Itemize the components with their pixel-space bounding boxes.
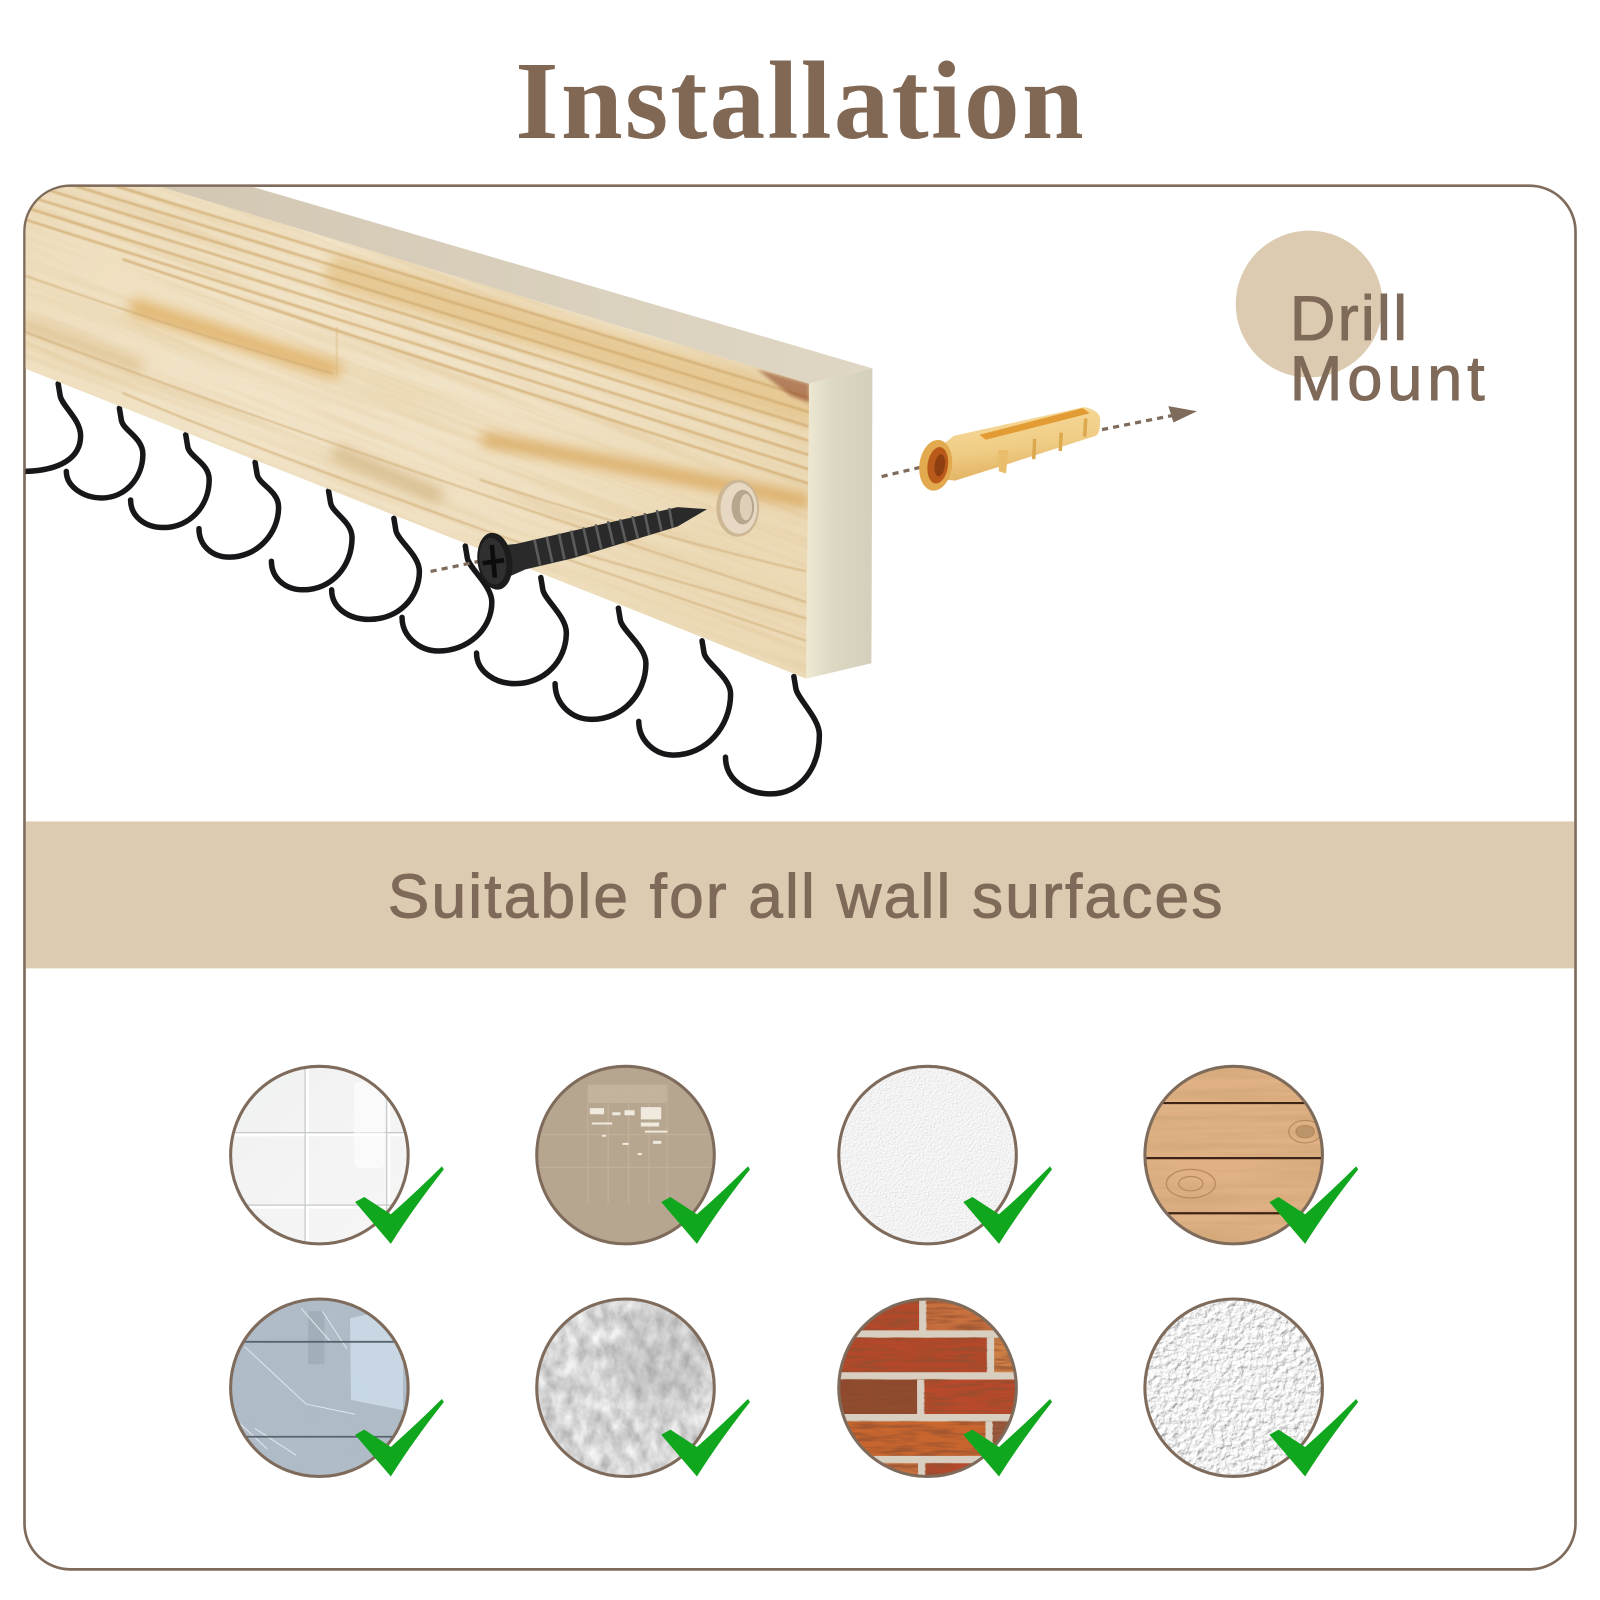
dashed guide: left of screw	[431, 561, 480, 571]
title: Installation	[515, 40, 1084, 163]
surface: wood planks	[1138, 1061, 1358, 1255]
dashed guide: right of board	[882, 466, 924, 477]
hooks	[20, 384, 819, 794]
banner text: Suitable for all wall surfaces	[388, 862, 1222, 931]
screw	[474, 507, 707, 592]
banner	[26, 821, 1574, 968]
product illustration: wooden rack with hooks	[26, 186, 872, 797]
surface: white tile	[224, 1061, 444, 1255]
surface: red brick	[837, 1298, 1052, 1478]
callout text: Drill	[1290, 284, 1407, 354]
callout circle	[1236, 231, 1383, 378]
board end face	[806, 368, 872, 679]
board top face	[160, 187, 872, 384]
surface: concrete	[531, 1294, 750, 1488]
board front face	[26, 186, 810, 678]
callout: drill mount	[1236, 231, 1485, 414]
wall anchor	[916, 407, 1100, 493]
surface: textured plaster	[1138, 1294, 1358, 1488]
mounting hole	[716, 480, 759, 537]
dashed arrow pointing to label	[1102, 406, 1197, 430]
callout text: Mount	[1290, 344, 1485, 414]
surface: white stucco	[832, 1061, 1052, 1255]
surface: beige glossy tile	[531, 1061, 750, 1255]
surface: grey marble	[224, 1294, 444, 1488]
